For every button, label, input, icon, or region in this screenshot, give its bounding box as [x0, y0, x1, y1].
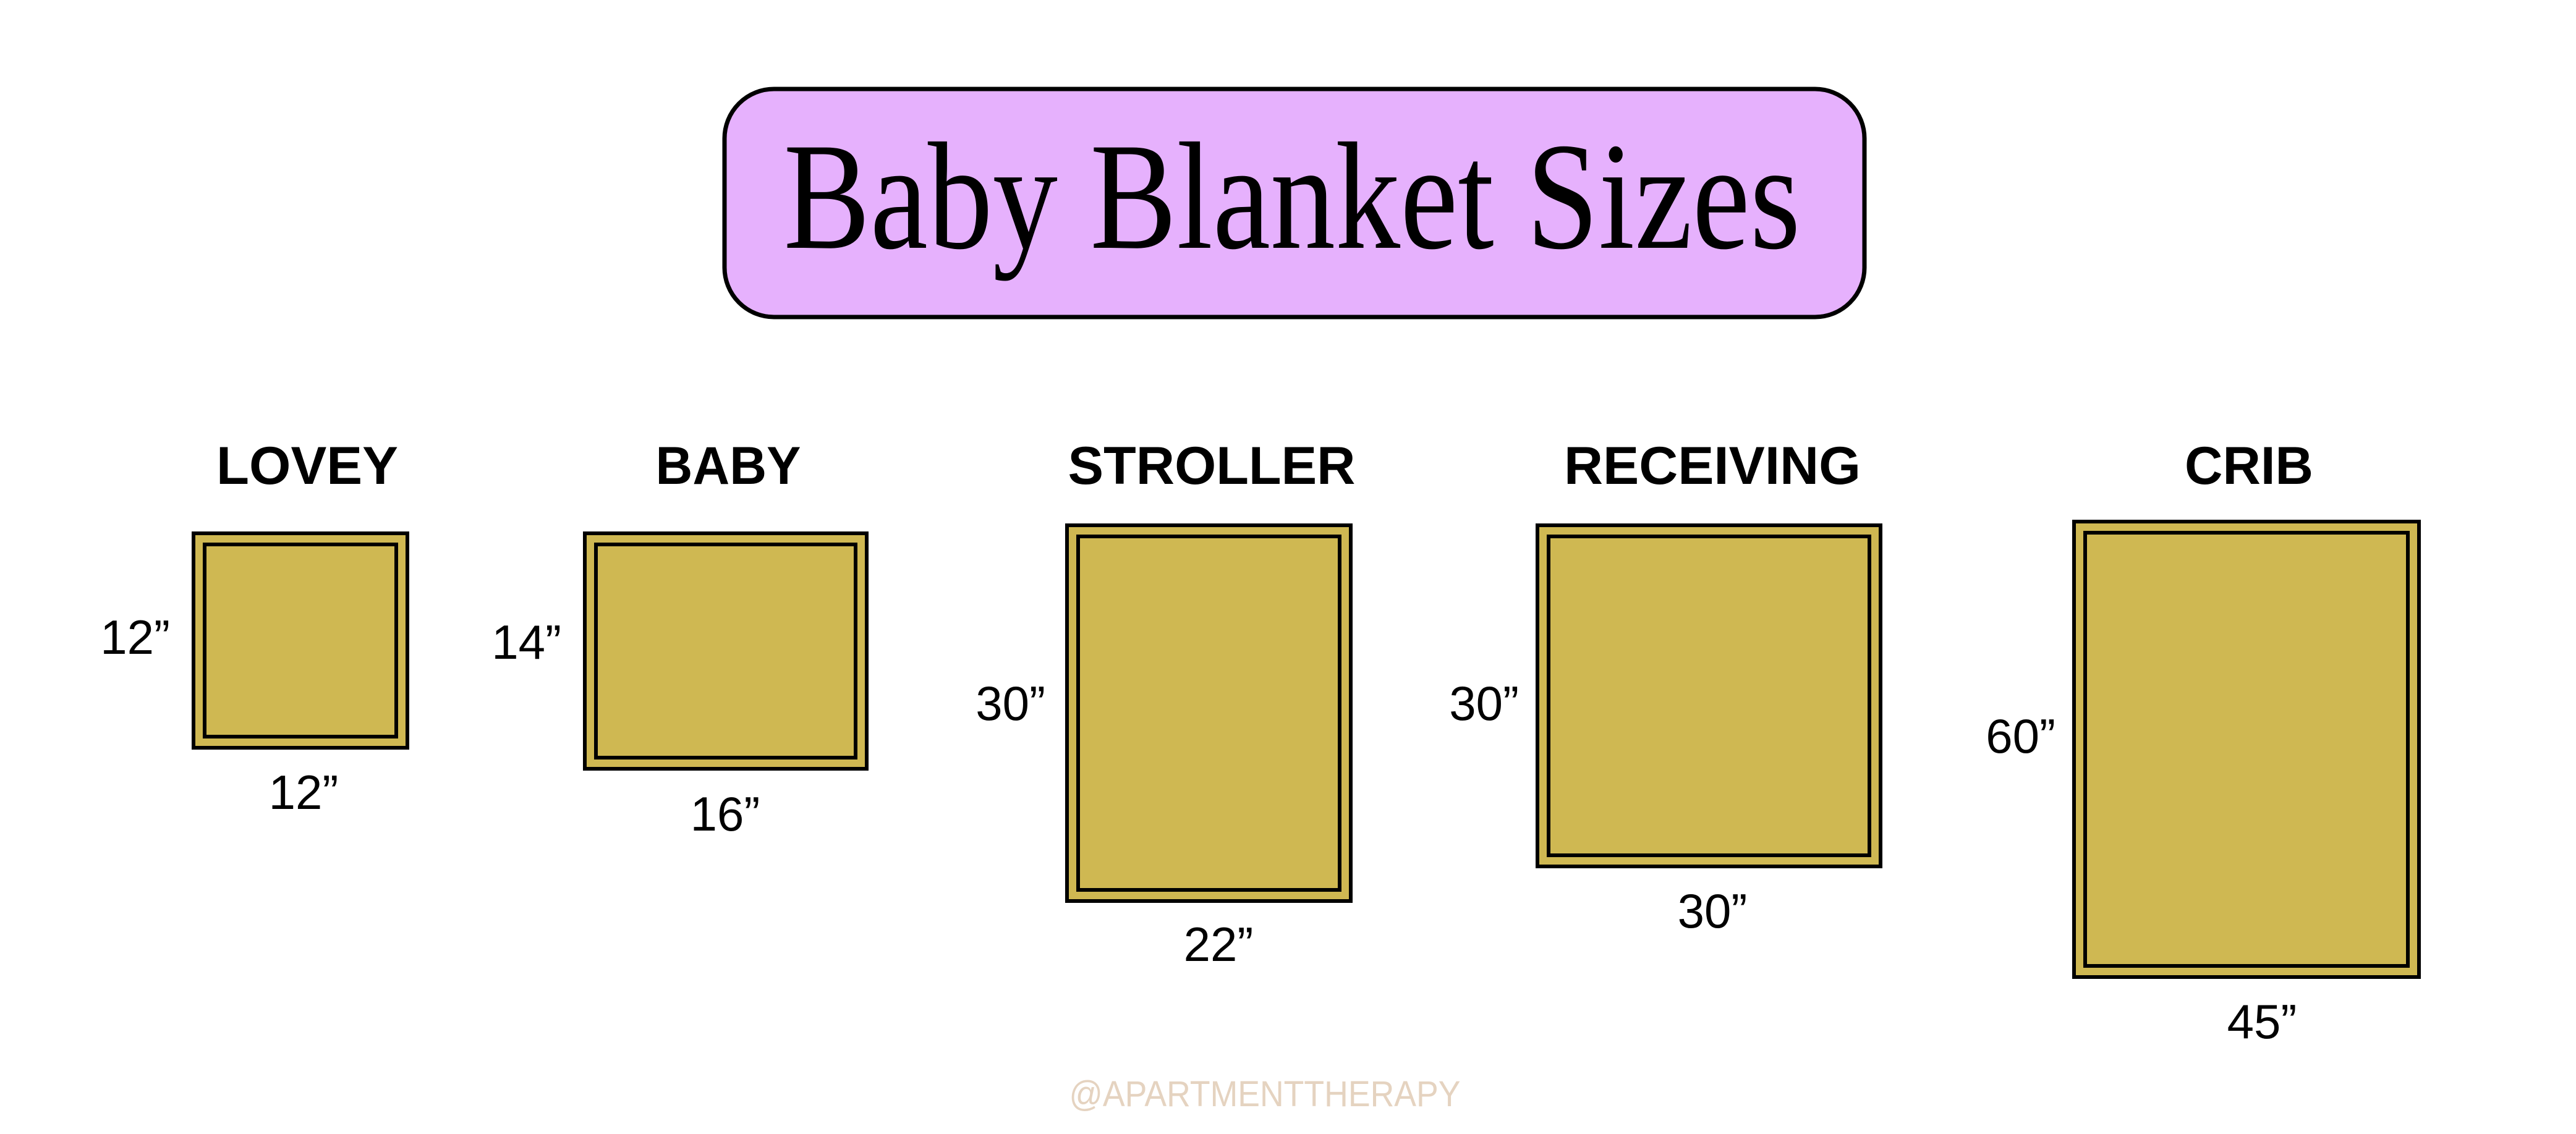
title: Baby Blanket Sizes [784, 111, 1800, 281]
dimension: width 22: 22” [1184, 917, 1253, 971]
blanket: receiving [1537, 525, 1881, 866]
dimension: width 30: 30” [1678, 884, 1747, 938]
dimension: height 30: 30” [976, 676, 1045, 730]
heading: BABY: BABY [655, 436, 801, 496]
panel: baby [491, 436, 867, 841]
blanket: lovey [193, 533, 407, 748]
blanket: stroller [1067, 525, 1351, 901]
dimension: width 16: 16” [691, 787, 760, 841]
heading: LOVEY: LOVEY [216, 436, 398, 496]
heading: STROLLER: STROLLER [1068, 436, 1355, 496]
footer credit: @APARTMENTTHERAPY [1069, 1074, 1460, 1114]
dimension: width 12: 12” [269, 765, 338, 819]
heading: RECEIVING: RECEIVING [1564, 436, 1861, 496]
dimension: height 12: 12” [100, 610, 170, 664]
heading: CRIB: CRIB [2185, 436, 2313, 496]
dimension: height 30: 30” [1449, 676, 1519, 730]
dimension: width 45: 45” [2227, 994, 2297, 1049]
title [725, 89, 1864, 317]
dimension: height 14: 14” [491, 615, 561, 669]
dimension: height 60: 60” [1986, 709, 2055, 763]
blanket: baby [585, 533, 867, 769]
blanket: crib [2074, 522, 2419, 977]
panel: receiving [1449, 436, 1881, 938]
panel: stroller [976, 436, 1355, 971]
panel: lovey [100, 436, 407, 819]
panel: crib [1986, 436, 2419, 1049]
